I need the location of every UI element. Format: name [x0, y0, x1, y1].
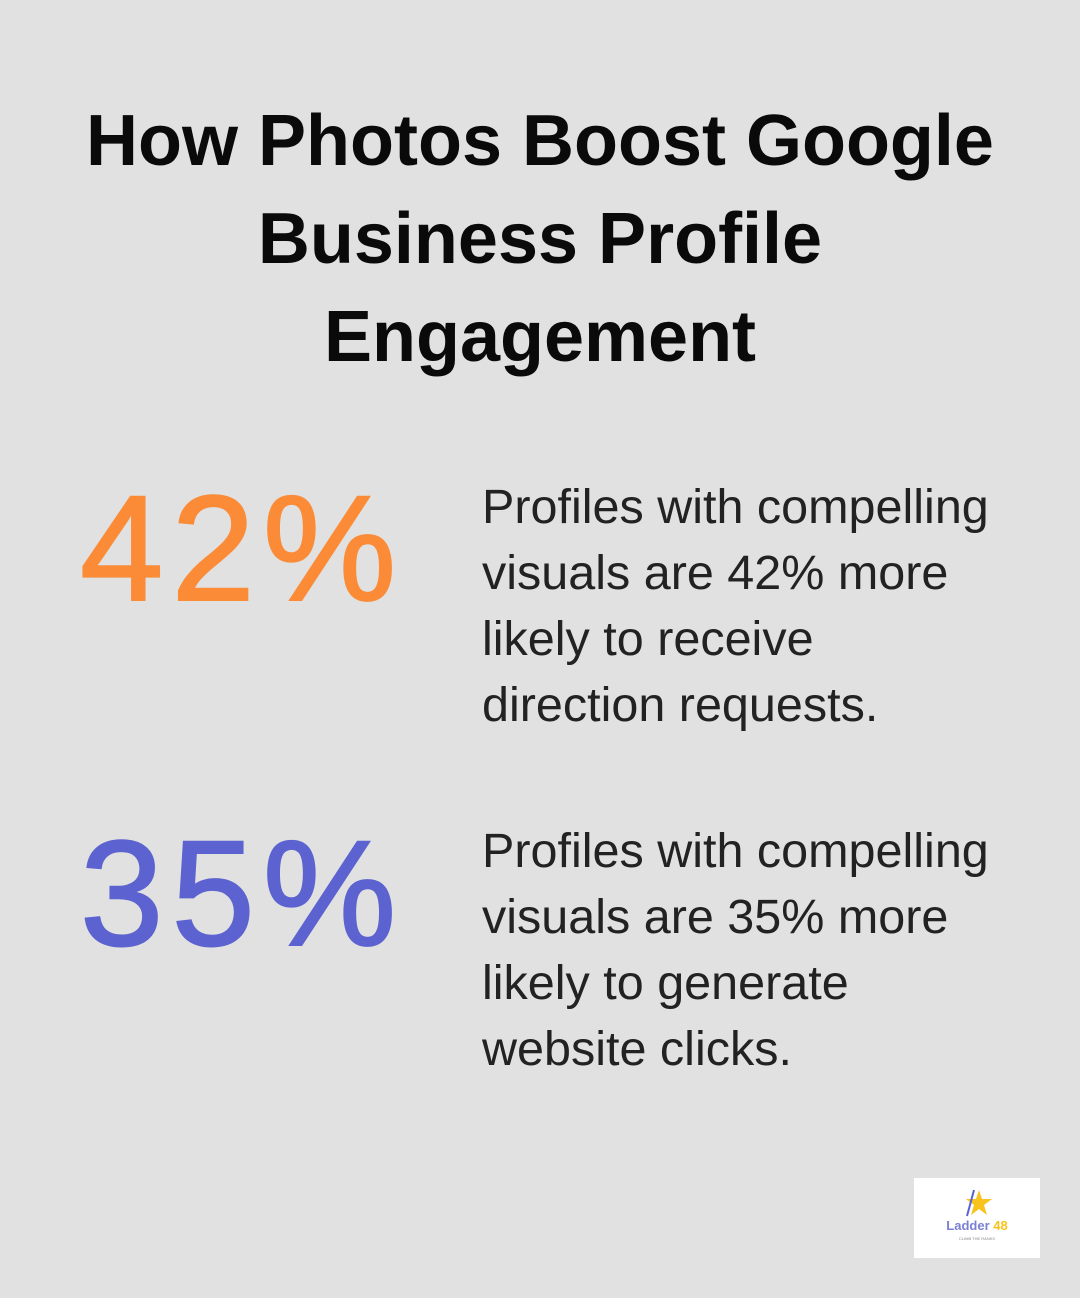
logo: Ladder 48: Ladder 48 [946, 1218, 1008, 1233]
title [86, 101, 994, 377]
title: Engagement [324, 297, 756, 377]
text: 35% description: website clicks. [482, 1022, 792, 1076]
text: 35% description: Profiles with compelling [482, 824, 989, 878]
stat: 42%: 42% [80, 464, 404, 632]
title: Business Profile [258, 199, 822, 279]
text: 42% description: direction requests. [482, 678, 878, 732]
text: 42% description: visuals are 42% more [482, 546, 948, 600]
text: 35% description [482, 824, 989, 1076]
logo: Ladder 48 [914, 1178, 1040, 1258]
title: How Photos Boost Google [86, 101, 994, 181]
logo: Ladder 48: CLIMB THE RANKS [959, 1236, 995, 1241]
icon: ladder star [966, 1190, 992, 1216]
text: 42% description: Profiles with compelling [482, 480, 989, 534]
text: 35% description: visuals are 35% more [482, 890, 948, 944]
stat: 35%: 35% [80, 809, 404, 977]
text: 42% description: likely to receive [482, 612, 814, 666]
text: 35% description: likely to generate [482, 956, 849, 1010]
text: 42% description [482, 480, 989, 732]
